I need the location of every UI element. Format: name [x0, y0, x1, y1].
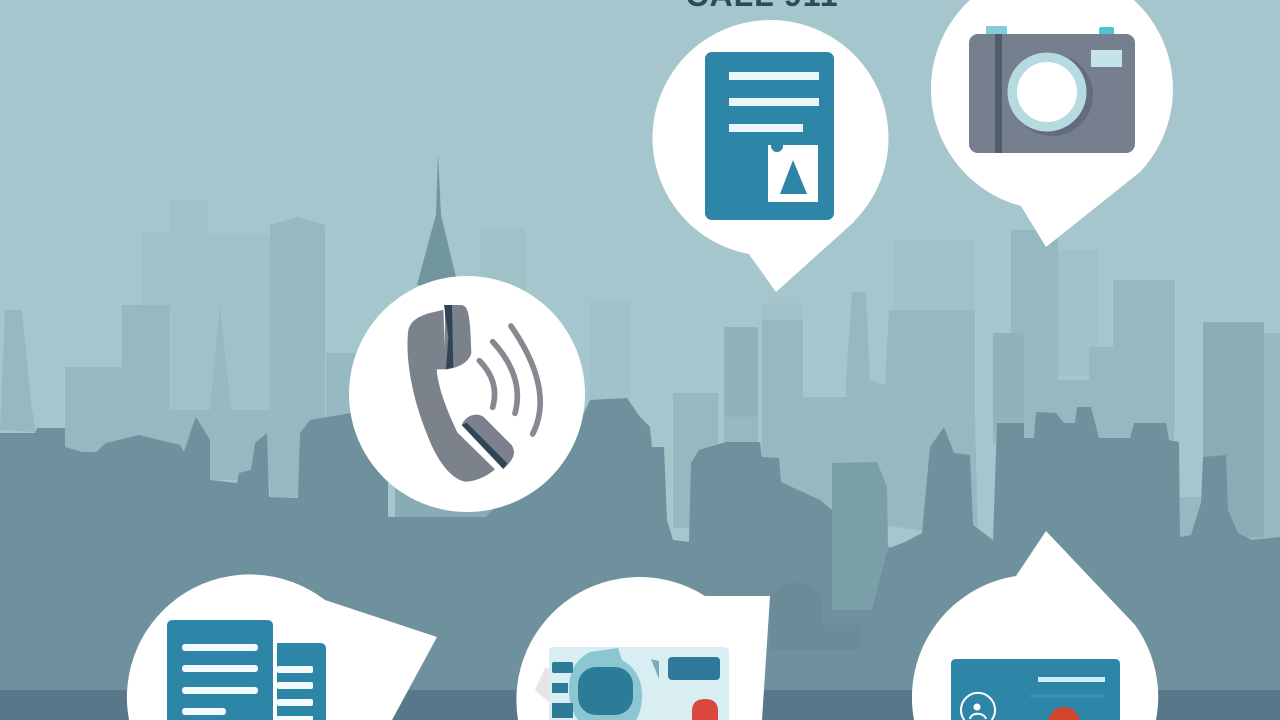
bubble shape	[349, 276, 585, 512]
bubble shape	[652, 20, 888, 292]
bubble shape	[127, 574, 437, 720]
bubble shape	[931, 0, 1173, 247]
icon: stacked documents	[167, 620, 326, 720]
bubble: id card	[912, 531, 1158, 720]
icon: phone handset	[407, 305, 540, 482]
icon: camera	[969, 26, 1135, 153]
spire tower	[417, 153, 458, 285]
ground band	[0, 690, 1280, 720]
icon: compact camera	[535, 647, 729, 720]
bubble: camera	[931, 0, 1173, 247]
mid foreground building	[832, 462, 888, 610]
icon: card	[951, 659, 1120, 720]
icon: document	[705, 52, 834, 220]
bubble shape	[912, 531, 1158, 720]
bubble: documents	[127, 574, 437, 720]
bubble shape	[516, 577, 770, 720]
dark foreground dome	[770, 582, 860, 650]
bubble: phone	[349, 276, 585, 512]
far skyline	[0, 200, 1280, 543]
bubble: camera front	[516, 577, 770, 720]
bubble: report document	[652, 20, 888, 292]
front skyline	[0, 398, 1280, 700]
